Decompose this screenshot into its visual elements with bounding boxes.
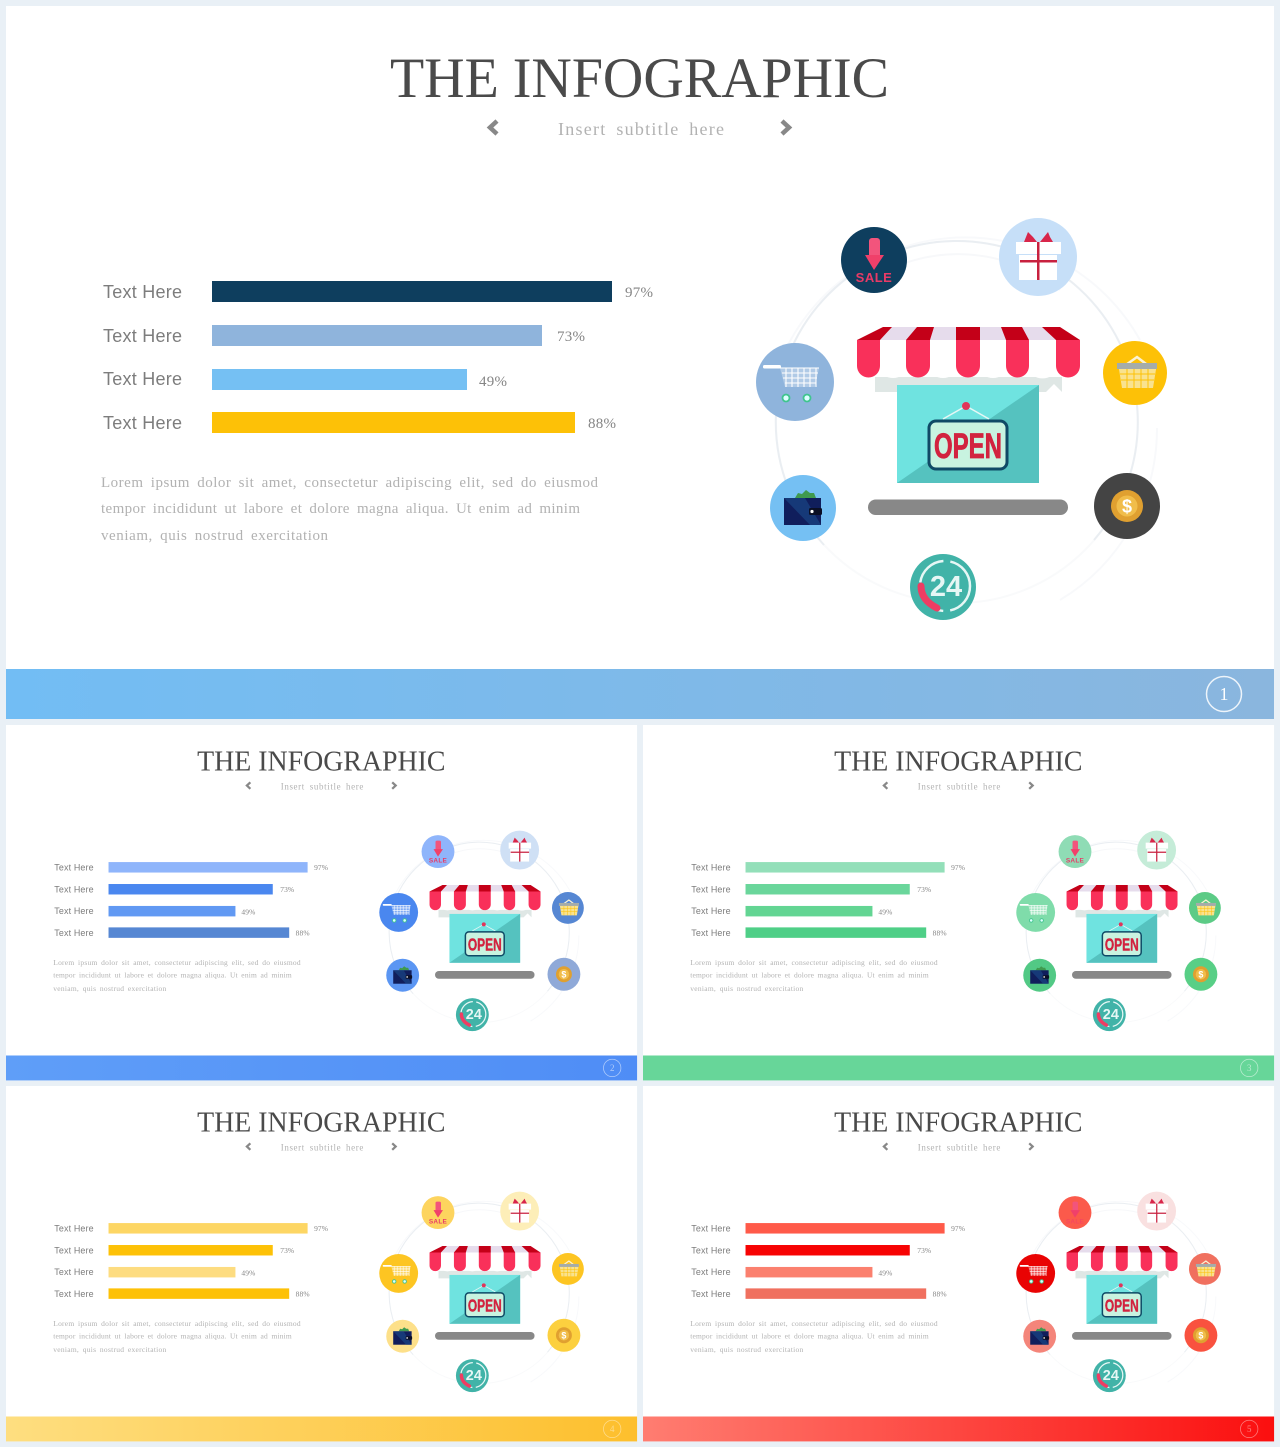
body text: Lorem ipsum dolor sit amet, consectetur adipiscing elit, sed do eiusmod: [53, 958, 301, 967]
icon: sale: SALE: [856, 270, 892, 285]
icon: left chevron: [247, 782, 250, 789]
bar row 2: Text Here: [54, 884, 94, 894]
bar row 1: [691, 862, 965, 873]
body text: veniam, quis nostrud exercitation: [53, 984, 167, 993]
body text: [690, 1319, 938, 1354]
storefront: [1067, 885, 1178, 979]
bar row 2: 73%: [280, 885, 294, 894]
body text: tempor incididunt ut labore et dolore magna aliqua. Ut enim ad minim: [101, 501, 580, 517]
storefront: [857, 327, 1080, 515]
icon: 24 hour support: 24: [466, 1007, 482, 1023]
bar chart: [54, 862, 328, 938]
icon: 24 hour support: [1093, 998, 1126, 1031]
bar row 1: Text Here: [103, 282, 182, 302]
bar row 2: 73%: [557, 329, 585, 345]
subtitle: Insert subtitle here: [918, 1142, 1000, 1152]
icon: 24 hour support: 24: [466, 1368, 482, 1384]
icon: basket: [1103, 341, 1167, 405]
icon: sale: [841, 227, 907, 293]
icon: coin: [547, 1319, 580, 1352]
bar row 2: [103, 325, 585, 346]
bar row 4: Text Here: [691, 1289, 731, 1299]
bar row 1: Text Here: [691, 1224, 731, 1234]
bar row 1: 97%: [625, 285, 653, 301]
body text: tempor incididunt ut labore et dolore magna aliqua. Ut enim ad minim: [53, 1332, 292, 1341]
icon: basket: [552, 1253, 584, 1285]
bar row 3: Text Here: [103, 369, 182, 389]
icon: coin: [1184, 1319, 1217, 1352]
bar row 3: 49%: [241, 907, 255, 916]
shop illustration: [1016, 831, 1221, 1031]
title: THE INFOGRAPHIC: [197, 1107, 445, 1138]
icon: gift: [500, 831, 539, 870]
bar row 1: [103, 281, 653, 302]
subtitle: Insert subtitle here: [558, 119, 724, 139]
bar row 2: [691, 884, 931, 894]
bar chart: [691, 1223, 965, 1299]
shop illustration: [756, 218, 1167, 620]
icon: 24 hour support: 24: [1103, 1368, 1119, 1384]
icon: cart: [756, 343, 834, 421]
icon: right chevron: [782, 121, 789, 134]
bar row 3: Text Here: [691, 1267, 731, 1277]
icon: gift: [500, 1192, 539, 1231]
storefront: [430, 885, 541, 979]
bar row 4: 88%: [933, 928, 947, 937]
icon: cart: [1016, 893, 1055, 932]
icon: basket: [1189, 1253, 1221, 1285]
page number: [1240, 1059, 1258, 1077]
shop illustration: [379, 1192, 584, 1392]
bar row 2: Text Here: [691, 884, 731, 894]
footer band: [6, 669, 1274, 719]
icon: 24 hour support: [910, 554, 976, 620]
icon: right chevron: [392, 782, 396, 789]
page number: 1: [1220, 684, 1228, 704]
shop illustration: [1016, 1192, 1221, 1392]
shop illustration: [379, 831, 584, 1031]
body text: Lorem ipsum dolor sit amet, consectetur adipiscing elit, sed do eiusmod: [690, 1319, 938, 1328]
bar chart: [103, 281, 653, 433]
icon: basket: [552, 892, 584, 924]
icon: wallet: [386, 1320, 419, 1353]
icon: left chevron: [247, 1143, 250, 1150]
body text: Lorem ipsum dolor sit amet, consectetur adipiscing elit, sed do eiusmod: [690, 958, 938, 967]
storefront: OPEN: [468, 1295, 502, 1315]
bar row 1: [691, 1223, 965, 1234]
icon: coin: [547, 958, 580, 991]
icon: wallet: [1023, 1320, 1056, 1353]
icon: right chevron: [392, 1143, 396, 1150]
subtitle: Insert subtitle here: [281, 781, 363, 791]
bar row 4: 88%: [296, 1289, 310, 1298]
bar row 2: Text Here: [691, 1245, 731, 1255]
bar row 3: 49%: [878, 1268, 892, 1277]
body text: [690, 958, 938, 993]
icon: right chevron: [1029, 782, 1033, 789]
bar row 4: [54, 927, 310, 938]
page number: [1206, 676, 1242, 712]
bar row 4: [691, 1288, 947, 1299]
page number: 5: [1247, 1424, 1252, 1434]
icon: sale: SALE: [429, 858, 448, 865]
bar row 3: Text Here: [691, 906, 731, 916]
icon: wallet: [386, 959, 419, 992]
bar chart: [691, 862, 965, 938]
body text: [101, 475, 598, 544]
page number: 4: [610, 1424, 615, 1434]
icon: cart: [379, 1254, 418, 1293]
bar row 1: Text Here: [54, 863, 94, 873]
storefront: [1067, 1246, 1178, 1340]
icon: gift: [1137, 831, 1176, 870]
bar row 2: Text Here: [54, 1245, 94, 1255]
icon: right chevron: [1029, 1143, 1033, 1150]
icon: sale: [1059, 835, 1091, 868]
icon: basket: [1189, 892, 1221, 924]
icon: cart: [1016, 1254, 1055, 1293]
icon: sale: [422, 1196, 454, 1229]
body text: [53, 958, 301, 993]
panel: green slide: [643, 725, 1274, 1080]
icon: left chevron: [490, 121, 497, 134]
title: THE INFOGRAPHIC: [197, 746, 445, 777]
icon: sale: [1059, 1196, 1091, 1229]
icon: coin: $: [561, 1330, 566, 1340]
panel: red slide: [643, 1086, 1274, 1441]
title: THE INFOGRAPHIC: [834, 746, 1082, 777]
page number: 2: [610, 1063, 614, 1073]
body text: Lorem ipsum dolor sit amet, consectetur adipiscing elit, sed do eiusmod: [101, 475, 598, 491]
icon: gift: [1137, 1192, 1176, 1231]
icon: 24 hour support: [456, 998, 489, 1031]
icon: wallet: [1023, 959, 1056, 992]
footer band: [6, 1416, 637, 1441]
icon: sale: [422, 835, 454, 868]
bar row 3: [691, 906, 892, 916]
bar row 4: [691, 927, 947, 938]
icon: 24 hour support: 24: [1103, 1007, 1119, 1023]
body text: tempor incididunt ut labore et dolore magna aliqua. Ut enim ad minim: [690, 1332, 929, 1341]
body text: veniam, quis nostrud exercitation: [690, 1345, 804, 1354]
subtitle: Insert subtitle here: [918, 781, 1000, 791]
icon: sale: SALE: [1066, 858, 1085, 865]
bar row 3: [54, 906, 255, 916]
bar row 4: Text Here: [691, 928, 731, 938]
icon: 24 hour support: 24: [930, 571, 962, 603]
bar row 4: [103, 412, 616, 433]
icon: coin: $: [1122, 496, 1132, 516]
bar row 3: [54, 1267, 255, 1277]
bar row 4: 88%: [296, 928, 310, 937]
icon: coin: $: [1198, 969, 1203, 979]
bar row 4: Text Here: [54, 928, 94, 938]
icon: coin: $: [561, 969, 566, 979]
body text: tempor incididunt ut labore et dolore magna aliqua. Ut enim ad minim: [690, 971, 929, 980]
bar chart: [54, 1223, 328, 1299]
icon: cart: [379, 893, 418, 932]
bar row 4: Text Here: [54, 1289, 94, 1299]
bar row 4: [54, 1288, 310, 1299]
bar row 1: 97%: [951, 1224, 965, 1233]
icon: gift: [999, 218, 1077, 296]
bar row 1: Text Here: [54, 1224, 94, 1234]
bar row 3: Text Here: [54, 1267, 94, 1277]
bar row 2: [691, 1245, 931, 1255]
page number: 3: [1247, 1063, 1252, 1073]
subtitle: Insert subtitle here: [281, 1142, 363, 1152]
icon: coin: [1184, 958, 1217, 991]
storefront: OPEN: [934, 427, 1002, 466]
icon: sale: SALE: [429, 1219, 448, 1226]
panel: blue slide: [6, 725, 637, 1080]
bar row 2: 73%: [280, 1246, 294, 1255]
bar row 3: 49%: [241, 1268, 255, 1277]
bar row 3: 49%: [479, 374, 507, 390]
bar row 3: [691, 1267, 892, 1277]
bar row 3: Text Here: [54, 906, 94, 916]
body text: veniam, quis nostrud exercitation: [690, 984, 804, 993]
bar row 3: 49%: [878, 907, 892, 916]
body text: veniam, quis nostrud exercitation: [53, 1345, 167, 1354]
storefront: OPEN: [1105, 934, 1139, 954]
bar row 1: [54, 1223, 328, 1234]
bar row 2: 73%: [917, 885, 931, 894]
bar row 1: [54, 862, 328, 873]
storefront: OPEN: [468, 934, 502, 954]
panel: yellow slide: [6, 1086, 637, 1441]
icon: left chevron: [884, 782, 887, 789]
icon: coin: $: [1198, 1330, 1203, 1340]
bar row 2: 73%: [917, 1246, 931, 1255]
bar row 2: [54, 884, 294, 894]
icon: coin: [1094, 473, 1160, 539]
page number: [1240, 1420, 1258, 1438]
icon: 24 hour support: [456, 1359, 489, 1392]
footer band: [643, 1055, 1274, 1080]
bar row 1: 97%: [314, 1224, 328, 1233]
icon: 24 hour support: [1093, 1359, 1126, 1392]
body text: Lorem ipsum dolor sit amet, consectetur adipiscing elit, sed do eiusmod: [53, 1319, 301, 1328]
title: THE INFOGRAPHIC: [390, 47, 889, 110]
bar row 1: 97%: [314, 863, 328, 872]
panel: main slide: [6, 6, 1274, 719]
page number: [603, 1420, 621, 1438]
bar row 4: 88%: [588, 416, 616, 432]
bar row 4: 88%: [933, 1289, 947, 1298]
bar row 2: [54, 1245, 294, 1255]
page number: [603, 1059, 621, 1077]
body text: veniam, quis nostrud exercitation: [101, 528, 328, 544]
bar row 3: [103, 369, 507, 390]
title: THE INFOGRAPHIC: [834, 1107, 1082, 1138]
storefront: [430, 1246, 541, 1340]
icon: sale: SALE: [1066, 1219, 1085, 1226]
footer band: [6, 1055, 637, 1080]
footer band: [643, 1416, 1274, 1441]
icon: wallet: [770, 475, 836, 541]
bar row 4: Text Here: [103, 413, 182, 433]
icon: left chevron: [884, 1143, 887, 1150]
bar row 1: 97%: [951, 863, 965, 872]
body text: [53, 1319, 301, 1354]
bar row 1: Text Here: [691, 863, 731, 873]
bar row 2: Text Here: [103, 326, 182, 346]
storefront: OPEN: [1105, 1295, 1139, 1315]
body text: tempor incididunt ut labore et dolore magna aliqua. Ut enim ad minim: [53, 971, 292, 980]
